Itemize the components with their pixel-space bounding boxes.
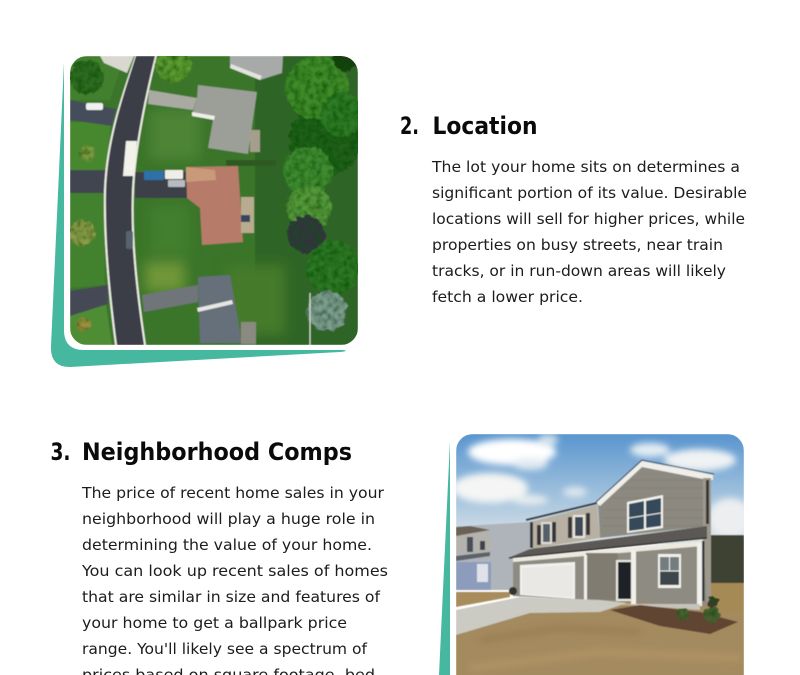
text block: location description: locations will sell for higher prices, while xyxy=(432,210,745,228)
ground xyxy=(456,600,744,675)
terracotta roof house xyxy=(186,166,243,245)
hedge xyxy=(226,160,276,166)
panel: comps photo frame xyxy=(439,434,752,675)
mulch bed and shrubs xyxy=(610,605,738,634)
infographic page xyxy=(50,56,746,675)
text block: neighborhood comps description: that are similar in size and features of xyxy=(82,588,381,606)
text block: location description xyxy=(431,158,747,306)
text block: neighborhood comps description: determining the value of your home. xyxy=(82,536,372,554)
heading: 3. Neighborhood Comps: Neighborhood Comps xyxy=(82,438,352,466)
driveway xyxy=(456,597,627,635)
concrete corner xyxy=(100,56,134,73)
trees xyxy=(69,47,364,331)
gray roof house xyxy=(192,85,257,154)
text block: neighborhood comps description: neighborhood will play a huge role in xyxy=(82,510,375,528)
text block: neighborhood comps description: your home to get a ballpark price xyxy=(82,614,347,632)
road with curbs xyxy=(104,56,157,345)
gable roof trim xyxy=(596,461,713,506)
garage door xyxy=(520,562,575,599)
front door xyxy=(616,560,632,601)
clouds xyxy=(452,434,752,538)
teal accent shape behind aerial photo xyxy=(51,62,346,367)
text block: neighborhood comps description: The price of recent home sales in your xyxy=(81,484,385,502)
porch columns xyxy=(584,555,587,600)
left lawns xyxy=(70,56,120,100)
light pole xyxy=(309,293,311,345)
text block: neighborhood comps description xyxy=(81,484,388,675)
image: two-story suburban house xyxy=(452,434,752,675)
upper window xyxy=(627,495,663,533)
driveways xyxy=(70,100,116,126)
ground floor wall xyxy=(513,541,707,606)
lower window xyxy=(658,554,681,588)
upper-left wall and shutters xyxy=(530,505,600,549)
text block: neighborhood comps description: You can look up recent sales of homes xyxy=(81,562,388,580)
slate roof house xyxy=(198,275,242,343)
text block: location description: properties on busy streets, near train xyxy=(432,236,723,254)
neighboring house xyxy=(456,522,530,590)
heading: 3. Neighborhood Comps: 3. xyxy=(50,438,70,466)
text block: location description: fetch a lower price. xyxy=(432,288,583,306)
heading: 2. Location: Location xyxy=(432,112,538,140)
dirt texture xyxy=(484,626,636,641)
vehicles xyxy=(86,103,103,110)
text block: location description: tracks, or in run-down areas will likely xyxy=(432,262,726,280)
top neighbor roof xyxy=(230,56,283,80)
text block: neighborhood comps description: range. You'll likely see a spectrum of xyxy=(82,640,368,658)
text block: location description: significant portion of its value. Desirable xyxy=(432,184,747,202)
panel: location photo frame xyxy=(51,47,364,367)
teal accent strip beside house photo xyxy=(439,441,450,675)
image: aerial view of neighborhood xyxy=(69,47,364,345)
text block: location description: The lot your home sits on determines a xyxy=(431,158,740,176)
upper gable wall xyxy=(598,465,708,538)
distant trees xyxy=(711,535,744,583)
heading: 2. Location: 2. xyxy=(400,112,419,140)
main roof xyxy=(508,526,707,558)
porch slab xyxy=(590,604,700,610)
